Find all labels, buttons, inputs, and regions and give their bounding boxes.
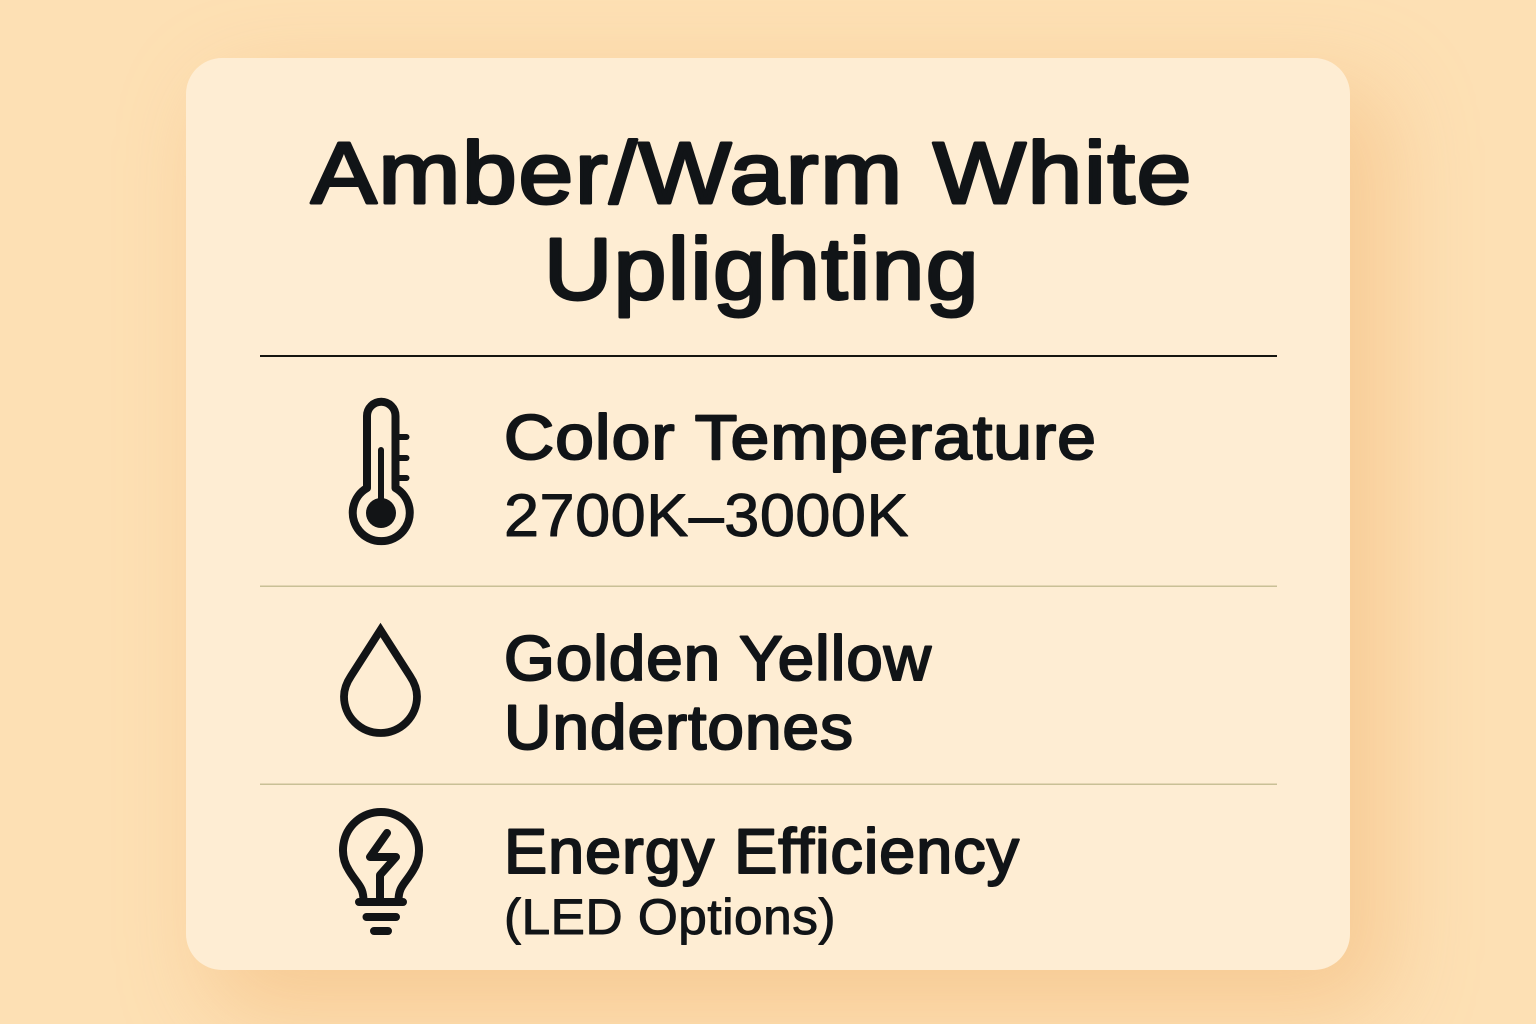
title: [311, 125, 1193, 318]
text: color temperature: Color Temperature: [504, 403, 1097, 473]
text: energy efficiency: [504, 817, 1020, 945]
text: golden yellow undertones: Undertones: [504, 693, 854, 763]
icon: water drop: [344, 630, 417, 733]
panel: card: [186, 58, 1350, 970]
text: energy efficiency: (LED Options): [504, 889, 836, 945]
text: color temperature: 2700K–3000K: [504, 482, 909, 549]
title: Uplighting: [544, 221, 980, 318]
text: color temperature: [504, 403, 1097, 549]
text: golden yellow undertones: Golden Yellow: [504, 624, 932, 694]
text: energy efficiency: Energy Efficiency: [504, 817, 1020, 887]
icon: thermometer: [353, 402, 410, 541]
title: Amber/Warm White: [311, 125, 1193, 222]
text: golden yellow undertones: [504, 624, 932, 763]
icon: light bulb: [343, 812, 419, 931]
